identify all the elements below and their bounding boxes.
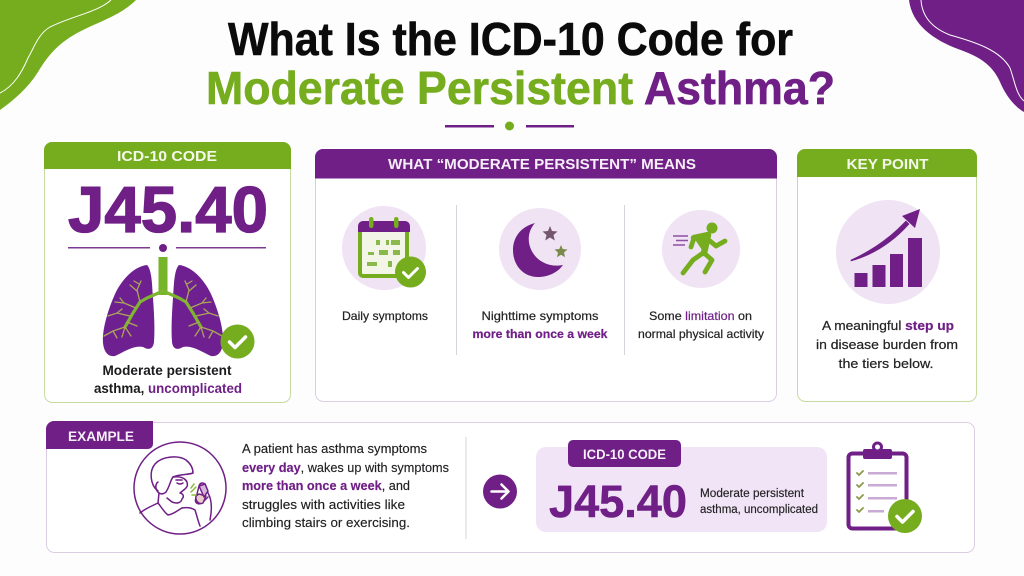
panel header: means — [315, 149, 777, 178]
example text: A patient has asthma symptoms — [242, 441, 427, 456]
example code value: J45.40 — [549, 476, 687, 527]
icon: rising bar chart — [836, 200, 940, 304]
key point text: in disease burden from — [816, 338, 958, 352]
label: activity limitation — [638, 309, 764, 341]
key point text: the tiers below. — [838, 357, 934, 371]
example code description — [700, 488, 818, 516]
icon: lungs — [103, 257, 223, 356]
example text: struggles with activities like — [242, 497, 405, 512]
decorative blob: purple top-right — [909, 0, 1024, 112]
title — [206, 13, 835, 114]
title: What Is the ICD-10 Code for — [228, 13, 793, 65]
code divider — [68, 244, 266, 252]
panel header: key point: KEY POINT — [846, 157, 929, 173]
panel: key point — [797, 149, 977, 402]
code description: asthma, uncomplicated — [94, 381, 242, 396]
example text: climbing stairs or exercising. — [242, 515, 410, 530]
icon: arrow — [483, 474, 517, 508]
code value: J45.40 — [68, 173, 268, 246]
example code tag — [568, 440, 681, 467]
example tag — [46, 421, 153, 449]
panel header: ICD-10 code: ICD-10 CODE — [117, 149, 217, 165]
example code description: Moderate persistent — [700, 488, 805, 500]
icon: person using inhaler — [134, 442, 226, 534]
example tag: EXAMPLE — [68, 429, 134, 444]
item: nighttime symptoms — [472, 208, 608, 341]
key point text: A meaningful step up — [822, 319, 954, 333]
label: nighttime symptoms: more than once a week — [472, 327, 608, 341]
example code tag: ICD-10 CODE — [583, 447, 666, 462]
label: activity limitation: Some limitation on — [649, 309, 752, 323]
panel header: key point — [797, 149, 977, 177]
example text: every day, wakes up with symptoms — [242, 460, 449, 475]
example text — [242, 441, 449, 530]
panel header: ICD-10 code — [44, 142, 291, 169]
label: daily symptoms: Daily symptoms — [342, 309, 428, 323]
example code panel — [536, 440, 827, 532]
code description — [94, 363, 242, 396]
title: Moderate Persistent Asthma? — [206, 62, 835, 114]
decorative blob: green top-left — [0, 0, 136, 110]
icon: check badge — [220, 324, 254, 358]
item: activity limitation — [638, 210, 764, 341]
icon: clipboard — [848, 443, 922, 533]
panel: what moderate persistent means — [315, 149, 777, 402]
key point text — [816, 319, 958, 371]
code description: Moderate persistent — [102, 363, 232, 378]
item: daily symptoms — [342, 206, 428, 323]
icon: runner — [662, 210, 740, 288]
panel: ICD-10 code — [44, 142, 291, 402]
example text: more than once a week, and — [242, 478, 410, 493]
label: nighttime symptoms — [472, 309, 608, 341]
icon: calendar — [342, 206, 426, 290]
label: activity limitation: normal physical activity — [638, 327, 764, 341]
label: nighttime symptoms: Nighttime symptoms — [482, 309, 598, 323]
title divider — [445, 122, 574, 130]
panel header: means: WHAT “MODERATE PERSISTENT” MEANS — [388, 157, 696, 173]
panel: example — [46, 421, 974, 552]
icon: moon and stars — [499, 208, 581, 290]
example code description: asthma, uncomplicated — [700, 504, 818, 516]
